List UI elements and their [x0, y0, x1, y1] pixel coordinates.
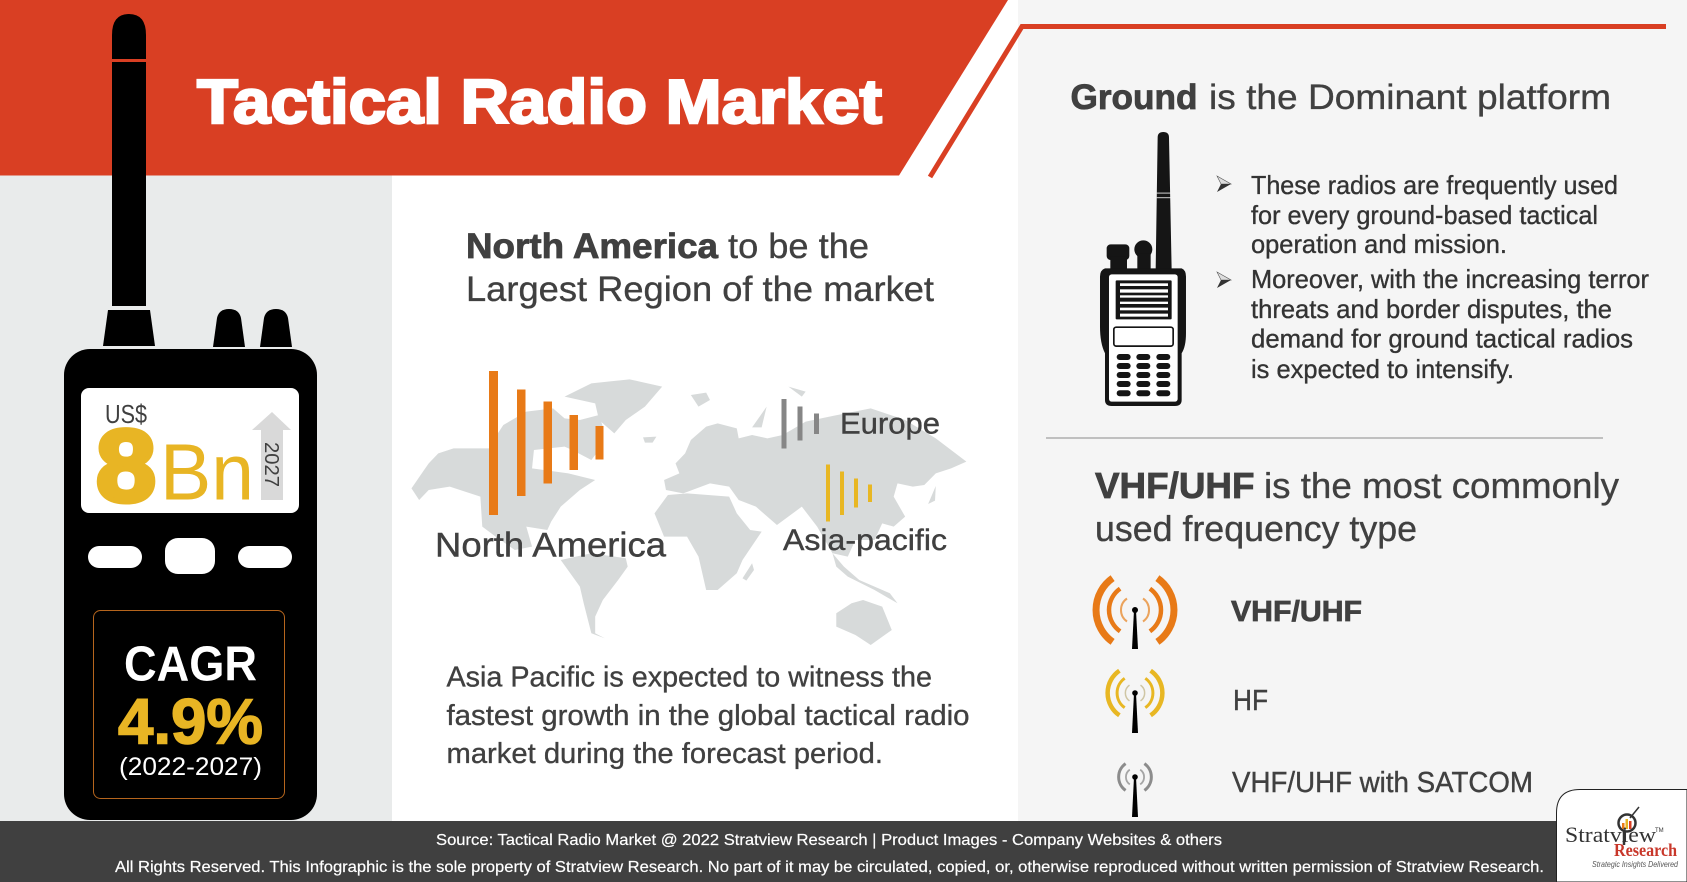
- heading: frequency type: VHF/UHF: [1095, 465, 1254, 506]
- text block: Asia Pacific growth: market during the forecast period.: [446, 738, 883, 770]
- logo trademark: TM: [1655, 828, 1664, 834]
- bullet list: ground radios: [1217, 170, 1649, 384]
- radio knob left: [213, 309, 245, 347]
- bullet text 2: threats and border disputes, the: [1251, 294, 1612, 324]
- logo wordmark: Stratview: [1565, 822, 1656, 847]
- heading: frequency type: used frequency type: [1095, 508, 1417, 549]
- text block: Asia Pacific growth: Asia Pacific is expected to witness the: [446, 662, 932, 694]
- label: VHF/UHF with SATCOM: VHF/UHF with SATCOM: [1232, 767, 1533, 799]
- bullet text 2: is expected to intensify.: [1251, 354, 1514, 384]
- radio body: [64, 349, 317, 820]
- bar group: Asia-pacific: [826, 464, 872, 522]
- antenna accent band: [112, 59, 146, 62]
- icon: HF signal tower: [1108, 671, 1162, 733]
- header accent line: [930, 26, 1666, 177]
- icon: VHF/UHF signal tower: [1096, 578, 1174, 649]
- radio button left: [88, 546, 142, 568]
- logo card: [1556, 790, 1687, 882]
- bullet text 2: Moreover, with the increasing terror: [1251, 264, 1649, 294]
- antenna base: [103, 310, 155, 346]
- radio illustration with market figures: [64, 14, 317, 820]
- logo research: Research: [1614, 840, 1677, 860]
- radio button centre: [165, 538, 215, 574]
- heading: ground platform: is the Dominant platform: [1209, 78, 1611, 117]
- region label: Europe: Europe: [840, 408, 940, 440]
- CAGR box: [94, 610, 284, 798]
- market value unit: Bn: [160, 428, 254, 516]
- region label: North America: North America: [435, 526, 666, 564]
- currency label: US$: [105, 399, 147, 429]
- region heading: to be the: [728, 227, 869, 266]
- radio screen: [81, 388, 299, 513]
- title: Tactical Radio Market: [197, 68, 882, 137]
- logo magnifier icon: [1618, 807, 1639, 845]
- radio knob right: [260, 309, 292, 347]
- CAGR value: 4.9%: [118, 686, 263, 758]
- panel: left grey background: [0, 175, 392, 821]
- footer source text: Source: Tactical Radio Market @ 2022 Stratview Research | Product Images - Company Websites & others: [436, 832, 1222, 849]
- footer bar: [0, 821, 1687, 882]
- CAGR label: CAGR: [124, 638, 257, 692]
- bullet text 2: demand for ground tactical radios: [1251, 324, 1633, 354]
- label: HF: HF: [1233, 685, 1268, 717]
- radio button right: [238, 546, 292, 568]
- logo tagline: Strategic Insights Delivered: [1592, 860, 1678, 869]
- bullet text 1: for every ground-based tactical: [1251, 200, 1598, 230]
- bullet text 1: operation and mission.: [1251, 229, 1507, 259]
- heading: frequency type: [1095, 465, 1619, 549]
- region heading: Largest Region of the market: [466, 270, 934, 309]
- bullet arrow 1: [1217, 176, 1231, 192]
- CAGR period: (2022-2027): [119, 753, 262, 781]
- radio antenna: [112, 14, 146, 306]
- region heading: [466, 227, 934, 309]
- bar group: North America: [489, 371, 604, 515]
- icon: SATCOM signal tower: [1119, 764, 1151, 817]
- label: VHF/UHF: VHF/UHF: [1231, 596, 1362, 628]
- bar group: Europe: [782, 399, 819, 448]
- region label: Asia-pacific: Asia-pacific: [783, 524, 947, 557]
- panel: right grey background: [1018, 0, 1687, 821]
- region heading: North America: [466, 227, 719, 266]
- logo: Stratview Research: [1556, 790, 1687, 882]
- world map: [411, 379, 966, 645]
- text block: Asia Pacific growth: [446, 662, 970, 770]
- footer rights text: All Rights Reserved. This Infographic is the sole property of Stratview Research. No part of it may be circulated, copied, or, otherwise reproduced without written permission of Stratview Research.: [115, 859, 1544, 876]
- text block: Asia Pacific growth: fastest growth in the global tactical radio: [446, 700, 970, 732]
- heading: ground platform: Ground: [1070, 78, 1198, 117]
- bullet text 1: These radios are frequently used: [1251, 170, 1618, 200]
- icon: handheld radio: [1100, 132, 1186, 406]
- bullet arrow 2: [1217, 272, 1231, 288]
- year label: 2027: [260, 442, 282, 487]
- market value number: 8: [96, 409, 156, 523]
- growth arrow: [252, 412, 291, 500]
- bullet text 1: [1251, 170, 1618, 259]
- heading: frequency type: is the most commonly: [1264, 465, 1619, 506]
- bullet text 2: [1251, 264, 1649, 384]
- header banner: [0, 0, 1008, 176]
